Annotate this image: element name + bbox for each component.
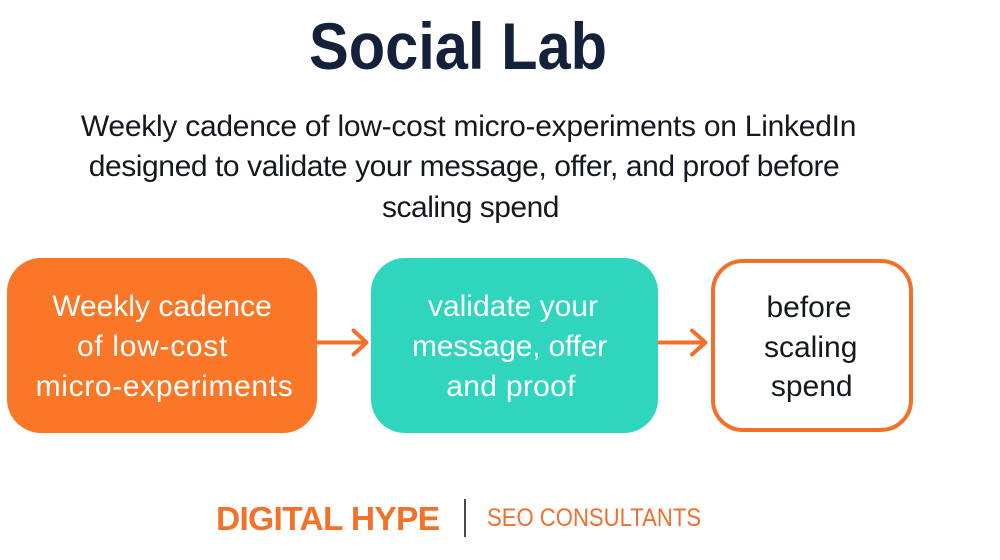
panel: weekly cadence: of low-cost [77, 330, 228, 363]
panel: weekly cadence: Weekly cadence [52, 290, 272, 323]
panel: validate: validate your [428, 290, 598, 323]
panel: weekly cadence [7, 258, 317, 433]
panel: validate: and proof [446, 370, 576, 403]
panel: validate [371, 258, 658, 433]
panel: weekly cadence: micro-experiments [36, 370, 293, 403]
subtitle text block [81, 110, 856, 224]
tagline: SEO Consultants: SEO CONSULTANTS [486, 504, 701, 532]
subtitle text block: scaling spend [382, 191, 559, 224]
divider [464, 499, 466, 537]
panel: before scaling spend [711, 259, 913, 432]
logo: Digital Hype: DIGITAL HYPE [216, 500, 439, 538]
panel: before scaling spend: scaling [764, 330, 857, 364]
subtitle text block: designed to validate your message, offer, and proof before [89, 150, 839, 183]
arrow: second to third [658, 328, 708, 357]
panel: before scaling spend: spend [771, 370, 853, 402]
arrow: first to second [317, 328, 369, 357]
title: Social Lab [309, 9, 607, 83]
panel: validate: message, offer [412, 330, 607, 362]
subtitle text block: Weekly cadence of low-cost micro-experiments on LinkedIn [81, 110, 856, 142]
panel: before scaling spend: before [766, 291, 852, 324]
